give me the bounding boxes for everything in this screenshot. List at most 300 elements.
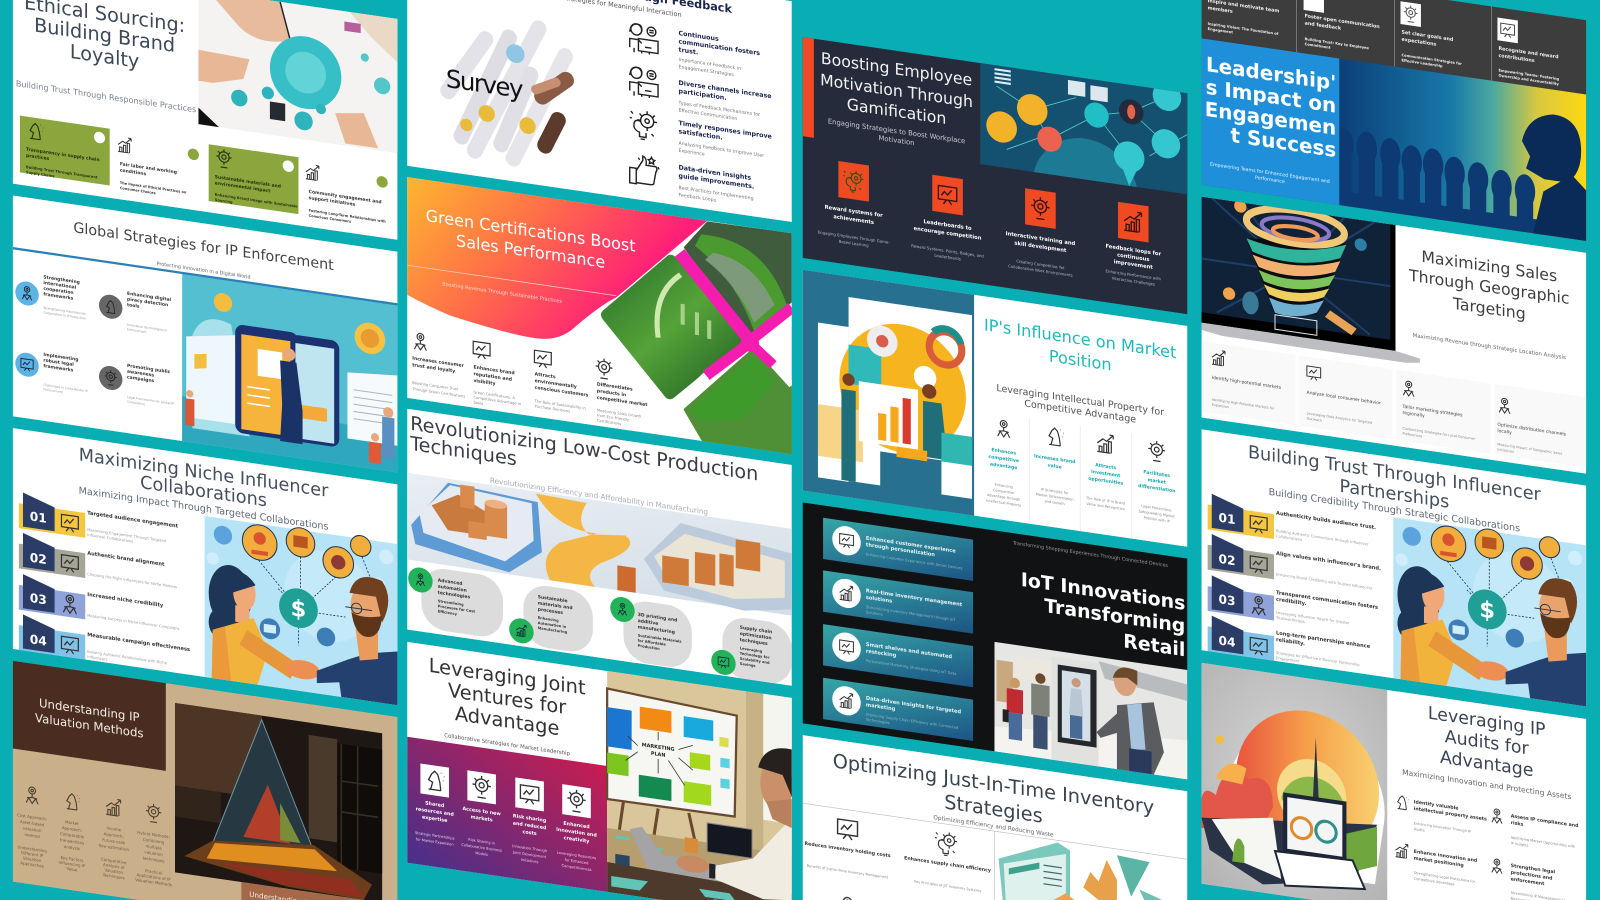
cards background xyxy=(1202,341,1586,468)
item: legal protections: enforcement xyxy=(1511,876,1545,887)
panel captions: Risk Sharing in xyxy=(468,838,495,846)
step 3: Production xyxy=(638,644,660,651)
panel captions: Enhanced xyxy=(563,821,590,831)
icon tile: risk sharing xyxy=(515,777,544,811)
panel captions xyxy=(415,799,597,873)
method icons and text: Analysis of xyxy=(103,862,125,870)
panel captions: for Market Expansion xyxy=(416,837,454,847)
card 4: Community engagement and xyxy=(309,189,382,206)
title: Gamification xyxy=(847,95,946,128)
title: IoT Innovations xyxy=(1021,568,1185,615)
method icons and text: Combining xyxy=(143,837,165,845)
list text: Influencer Collaborations xyxy=(87,533,133,544)
top columns: Commitment xyxy=(1305,42,1331,50)
item: legal protections: Strengthen legal xyxy=(1511,863,1555,875)
item: data-driven insights: Data-driven insights xyxy=(679,163,751,182)
icon tile: shared resources xyxy=(420,763,449,798)
method icons and text: Comparable xyxy=(60,831,85,839)
item: piracy detection: tools xyxy=(127,302,140,310)
list text: credibility. xyxy=(1276,597,1306,607)
item: data-driven insights: Best Practices for Implementing xyxy=(679,185,754,202)
title panel xyxy=(1202,38,1339,205)
item: innovation positioning: market positioning xyxy=(1414,855,1464,869)
title: Loyalty xyxy=(70,40,139,73)
top columns: Effective Leadership xyxy=(1402,58,1443,68)
method icons and text: Market xyxy=(65,819,79,826)
item: legal protections: protections and xyxy=(1511,870,1552,882)
card: inventory: Streamlining Inventory Management through IoT xyxy=(866,605,956,622)
title: IP's Influence on Market xyxy=(984,315,1176,362)
column: investment: The Role of IP in Brand xyxy=(1085,496,1125,506)
item: international cooperation: cooperation xyxy=(43,286,74,296)
step 1: Advanced xyxy=(438,577,462,587)
item: public awareness xyxy=(99,364,174,406)
method icons and text: Comparative xyxy=(101,857,127,865)
benefit columns: Measuring Sales Growth xyxy=(597,408,642,419)
item: public awareness: Promoting public xyxy=(127,363,171,375)
benefit columns: products in xyxy=(597,388,626,398)
card: personalization: Enhanced customer experience xyxy=(866,535,956,555)
reward systems: Engaging Employees Through Game- xyxy=(818,229,890,245)
card: smart shelves: Smart shelves and automated xyxy=(866,642,952,660)
list text xyxy=(87,510,190,674)
title: Maximizing Niche Influencer xyxy=(79,444,329,502)
item: innovation positioning: Strengthening Legal Protections for xyxy=(1414,871,1476,884)
step 2: materials and xyxy=(538,600,573,611)
benefit columns: competitive market xyxy=(597,395,648,408)
item: public awareness: Compliance xyxy=(127,400,145,406)
title: Building Trust Through Influencer xyxy=(1248,442,1541,506)
item: data-driven insights xyxy=(630,154,754,209)
column: competitive advantage: Intellectual Property xyxy=(986,498,1021,508)
subtitle: Leveraging Intellectual Property for xyxy=(996,383,1164,418)
leaderboards: Leaderboards to xyxy=(923,219,972,232)
item: continuous communication: Continuous xyxy=(679,29,719,43)
slide: leadership engagement xyxy=(1202,0,1586,241)
step 3: 3D printing and xyxy=(638,612,677,624)
column: competitive advantage: Enhancing xyxy=(995,483,1013,489)
benefit columns: reputation and xyxy=(473,371,512,383)
list text: Targeted audience engagement xyxy=(87,510,179,530)
panel captions: Competitiveness xyxy=(562,864,592,872)
item: continuous communication: Importance of Feedback in xyxy=(679,57,741,72)
title: Leveraging IP xyxy=(1428,704,1546,741)
card: tailor marketing: regionally xyxy=(1403,410,1425,419)
step 2 xyxy=(509,581,593,655)
card 1 xyxy=(20,116,110,187)
list text xyxy=(1275,510,1381,675)
subtitle: Building Trust Through Responsible Practices xyxy=(16,78,196,114)
card: targeted marketing: Data-driven insights for targeted xyxy=(866,696,961,715)
title: Revolutionizing Low-Cost Production xyxy=(410,412,758,486)
list text: Transparent communication fosters xyxy=(1276,590,1378,611)
item: public awareness: awareness xyxy=(127,369,154,379)
item: public awareness: Legal Frameworks for Global IP xyxy=(127,395,174,406)
step 3: additive xyxy=(638,618,658,627)
method icons and text: Approaches xyxy=(20,860,44,869)
method icons and text: valuation xyxy=(23,825,42,833)
column: investment: Attracts xyxy=(1095,462,1116,471)
title: Position xyxy=(1049,346,1112,375)
item: robust legal xyxy=(15,352,88,394)
card: distribution channels: Measuring Impact of Geographic Sales xyxy=(1497,442,1562,456)
card 4: Conscious Consumers xyxy=(309,214,351,224)
slide: geographic targeting xyxy=(1202,195,1586,474)
top columns: Inspiring Vision: The Foundation of xyxy=(1208,22,1279,36)
column: competitive advantage: advantage xyxy=(990,461,1017,471)
subtitle: Collaborative Strategies for Market Leadership xyxy=(444,733,571,757)
gradient panel xyxy=(407,737,607,892)
title: Boosting Employee xyxy=(821,48,972,90)
item: third icon xyxy=(840,896,855,900)
method icons and text: multiple xyxy=(145,843,162,851)
step 4: techniques xyxy=(740,637,768,647)
card: personalization: Enhancing Customer Experience with Smart Devices xyxy=(866,552,962,571)
list text: Collaborations xyxy=(1276,534,1302,542)
item: diverse channels: participation. xyxy=(679,87,727,102)
title panel: Engagemen xyxy=(1205,97,1336,140)
title block xyxy=(13,661,166,771)
method icons and text: Valuation xyxy=(105,867,123,875)
illustration panel xyxy=(803,270,974,517)
method icons and text: valuation xyxy=(144,849,163,857)
panel captions: Risk sharing xyxy=(513,813,547,824)
title: Sales Performance xyxy=(456,231,605,272)
illustration: influencer handshake xyxy=(1393,514,1586,706)
image: marketing plan whiteboard: MARKETING xyxy=(642,742,675,753)
slide: joint ventures xyxy=(407,642,793,900)
step 4: optimization xyxy=(740,631,772,641)
item: continuous communication: trust. xyxy=(679,46,698,57)
item: timely responses xyxy=(630,109,773,168)
item: valuable assets: Identify valuable xyxy=(1414,799,1458,812)
numbered list: 01 xyxy=(1219,511,1236,527)
item: data-driven insights: guide improvements. xyxy=(679,172,754,191)
step 3 xyxy=(610,595,692,670)
top columns: Ownership and Accountability xyxy=(1498,74,1559,86)
top columns: Empowering Teams: Fostering xyxy=(1498,68,1559,81)
item: supply chain: Key Principles of JIT Inventory Systems xyxy=(914,879,981,893)
step 2: processes xyxy=(538,607,563,616)
step 4: Technology for xyxy=(740,651,770,660)
benefit columns: from Eco-Friendly xyxy=(597,413,630,422)
method icons and text: Future cash xyxy=(102,837,126,846)
card 3: Sustainable materials and xyxy=(215,174,281,190)
subtitle: Engaging Strategies to Boost Workplace xyxy=(828,117,965,145)
list text: Authenticity builds audience trust. xyxy=(1276,511,1376,531)
list text: Choosing the Right Influencers for Niche Markets xyxy=(87,572,177,589)
column: differentiation xyxy=(1138,438,1175,524)
step 1: Streamlining xyxy=(438,599,464,607)
panel captions: markets xyxy=(471,814,493,824)
item: compliance: Assess IP compliance and xyxy=(1511,813,1578,829)
step 3: manufacturing xyxy=(638,624,675,636)
top columns: Building Trust: Key to Employee xyxy=(1305,37,1369,50)
item: continuous communication xyxy=(630,22,760,82)
top columns: Set clear goals and xyxy=(1402,29,1454,43)
top columns xyxy=(1208,0,1559,91)
image: speaker and crowd xyxy=(1333,58,1586,241)
accent rule xyxy=(407,265,616,296)
card: tailor marketing xyxy=(1402,380,1476,446)
card: distribution channels: Optimize distribution channels xyxy=(1497,422,1567,438)
leaderboards xyxy=(911,172,984,265)
card 2 xyxy=(118,138,199,194)
method icons and text: Applications of IP xyxy=(136,872,171,882)
panel captions: expertise xyxy=(422,814,448,824)
slide: IoT retail xyxy=(803,502,1187,780)
subtitle: Maximizing Innovation and Protecting Assets xyxy=(1402,768,1571,801)
top columns: expectations xyxy=(1402,37,1437,48)
top columns: contributions xyxy=(1498,53,1535,64)
title: Audits for xyxy=(1445,727,1529,760)
item: data-driven insights: Feedback Loops xyxy=(679,192,717,204)
card: inventory: Solutions xyxy=(866,610,883,617)
benefit columns: Differentiates xyxy=(597,381,633,393)
list text: Engagement xyxy=(1276,656,1300,664)
title: Transforming xyxy=(1044,594,1185,638)
item: robust legal: Implementing xyxy=(43,352,78,363)
item: timely responses: satisfaction. xyxy=(679,127,723,142)
item: compliance: IP Insights xyxy=(1511,841,1529,848)
method icons and text: Understanding xyxy=(18,844,47,854)
image: marketing plan whiteboard: PLAN xyxy=(651,751,665,759)
card 1: Supply Chains xyxy=(26,170,54,178)
card: targeted marketing: Improving Supply Chain Efficiency with Connected xyxy=(866,713,959,730)
title: Collaborations xyxy=(140,472,267,511)
benefit columns: Attracts xyxy=(535,371,556,380)
title: Optimizing Just-In-Time Inventory xyxy=(833,749,1154,819)
top columns: Recognize and reward xyxy=(1498,46,1559,61)
column: competitive advantage: Enhances xyxy=(991,447,1016,457)
top columns: Communication Strategies for xyxy=(1402,53,1462,66)
item: international cooperation: frameworks xyxy=(43,291,74,302)
card: smart shelves: restocking xyxy=(866,649,897,659)
item: piracy detection: Enhancing digital xyxy=(127,291,171,303)
slide: green certifications xyxy=(407,177,792,457)
card: targeted marketing: Technologies xyxy=(865,718,890,725)
panel captions: costs xyxy=(523,829,537,837)
item: piracy detection: Innovative Technologies in xyxy=(127,323,167,333)
card: distribution channels xyxy=(1497,397,1567,462)
list text: Increased niche credibility xyxy=(87,592,164,609)
divider line xyxy=(13,247,397,305)
dividers xyxy=(1029,418,1131,539)
method icons and text: analysis xyxy=(64,844,80,851)
subtitle: Boosting Revenue Through Sustainable Practices xyxy=(442,281,562,305)
method icons and text: Income xyxy=(106,825,122,833)
subtitle: Maximizing Revenue through Strategic Location Analysis xyxy=(1413,333,1566,361)
card: consumer behavior: Leveraging Data Analytics for Targeted xyxy=(1307,411,1372,425)
benefit columns xyxy=(411,330,648,430)
subtitle: Maximizing Impact Through Targeted Collaborations xyxy=(79,485,328,533)
list text: Long-term partnerships enhance xyxy=(1276,630,1371,650)
panel captions: for Enhanced xyxy=(565,858,588,865)
item: supply chain xyxy=(904,826,991,895)
panel captions: Models xyxy=(475,851,488,857)
step 4: Supply chain xyxy=(740,625,772,635)
item: valuable assets: Enhancing Innovation Through IP xyxy=(1414,821,1471,834)
list text: Measurable campaign effectiveness xyxy=(87,632,190,653)
card 3 xyxy=(209,144,298,214)
method icons and text: Value xyxy=(66,866,78,873)
card 4: Fostering Long-Term Relationships with xyxy=(309,208,386,224)
interactive training: Creating Competitive Yet xyxy=(1016,258,1065,270)
interactive training: Interactive training and xyxy=(1006,231,1075,247)
item: robust legal: frameworks xyxy=(43,363,74,374)
slide: IP audits xyxy=(1202,663,1586,900)
title: Leveraging Joint xyxy=(429,654,586,700)
illustration: gauge and laptop xyxy=(1202,663,1387,900)
slide: IP valuation methods xyxy=(13,661,397,900)
card: distribution channels: locally xyxy=(1497,428,1512,436)
interactive training: skill development xyxy=(1014,241,1067,254)
title panel: s Impact on xyxy=(1206,75,1336,118)
item: timely responses: Analyzing Feedback to Improve User xyxy=(679,141,764,159)
item: international cooperation xyxy=(15,275,86,320)
card: consumer behavior: Analyze local consumer behavior xyxy=(1307,390,1381,407)
list text: reliability. xyxy=(1276,637,1305,647)
method icons and text: Cost Approach: xyxy=(17,812,47,822)
method icons and text: Techniques xyxy=(102,872,125,880)
card 2: The Impact of Ethical Practices on xyxy=(120,181,187,195)
list text: Enhancing Brand Credibility with Trusted Influencers xyxy=(1276,572,1372,590)
title panel: Leadership' xyxy=(1206,52,1336,95)
column: differentiation: market xyxy=(1148,477,1167,486)
reward systems: achievements xyxy=(833,214,874,226)
list text: Strategies for Effective Influencer Partnership xyxy=(1276,651,1360,667)
column: competitive advantage xyxy=(986,418,1021,508)
method icons and text: techniques xyxy=(143,855,165,864)
item: compliance: risks xyxy=(1511,820,1523,828)
item: legal protections xyxy=(1492,858,1567,900)
item: diverse channels: Diverse channels increase xyxy=(679,79,772,100)
column: investment: Value and Recognition xyxy=(1086,502,1125,511)
item: innovation positioning: Enhance innovation and xyxy=(1414,849,1477,864)
item: holding costs: Reduces inventory holding costs xyxy=(805,841,891,859)
title: Ventures for xyxy=(448,679,567,719)
card: personalization xyxy=(823,518,973,581)
card: high-potential markets xyxy=(1212,349,1282,417)
list text: Leveraging Influencer Reach for Greater xyxy=(1276,611,1350,625)
slide: low-cost production xyxy=(407,409,792,687)
top columns: and feedback xyxy=(1305,20,1342,32)
method icons and text: Valuation xyxy=(23,855,42,863)
top columns: members xyxy=(1208,5,1233,15)
numbered list xyxy=(1208,493,1274,661)
column: investment xyxy=(1085,432,1125,511)
image: funnel on laptop xyxy=(1202,195,1420,365)
step 2: Sustainable xyxy=(538,594,568,604)
card: personalization: through personalization xyxy=(866,542,935,558)
accent bar xyxy=(803,37,814,138)
title: Partnerships xyxy=(1339,476,1449,513)
card: inventory: Real-time inventory management xyxy=(866,588,963,608)
method icons and text: Approach: xyxy=(62,825,82,833)
feedback loops: Interactive Challenges xyxy=(1112,275,1155,287)
method icons and text: Influencing IP xyxy=(59,860,86,869)
list text: Measuring Success in Niche Influencer Campaigns xyxy=(87,614,179,631)
item: continuous communication: communication fosters xyxy=(679,37,760,57)
step 1: Efficiency xyxy=(438,609,458,616)
item: continuous communication: Engagement Strategies xyxy=(679,64,734,78)
item: piracy detection xyxy=(98,292,171,334)
method icons and text: Valuation Methods xyxy=(135,877,172,887)
list text: Building Authentic Relationships with Niche xyxy=(87,650,168,665)
rules xyxy=(803,803,1187,900)
item: public awareness: campaigns xyxy=(127,374,155,384)
feedback loops: improvement xyxy=(1114,259,1153,271)
panel captions: Access to new xyxy=(462,806,501,818)
column: investment: investment xyxy=(1091,469,1121,479)
leaderboards: Reward Systems: Points, Badges, and xyxy=(911,243,984,259)
panel captions: Joint Development xyxy=(512,850,547,859)
slide: gamification xyxy=(803,29,1187,314)
icon tile: innovation xyxy=(562,784,591,818)
step 3: for Affordable xyxy=(638,639,666,647)
benefit columns: Green Certifications: A xyxy=(473,390,515,400)
image: gamification network xyxy=(980,55,1187,194)
numbered list: 02 xyxy=(30,551,47,567)
image: smart store photo xyxy=(994,642,1187,780)
panel captions: Collaborative Business xyxy=(461,843,502,853)
image: green glass panels xyxy=(607,206,792,457)
method icons and text: Asset-based xyxy=(20,819,45,827)
column: differentiation: Safeguarding Market xyxy=(1139,509,1175,519)
numbered list: 03 xyxy=(1219,592,1236,609)
column: brand value: value xyxy=(1048,463,1062,471)
benefit columns: Increases consumer xyxy=(412,356,464,369)
column: competitive advantage: Advantage through xyxy=(987,493,1020,502)
benefit columns: Sales xyxy=(473,401,483,406)
illustration: influencer handshake xyxy=(205,513,397,705)
subtitle: Protecting Innovation in a Digital World xyxy=(157,261,251,281)
benefit columns: environmentally xyxy=(535,378,577,390)
item: international cooperation: Strengthening International xyxy=(43,306,86,316)
column: differentiation: Facilitates xyxy=(1143,469,1170,479)
title: Advantage xyxy=(1440,748,1533,781)
panel captions: Strategic Partnerships xyxy=(415,831,455,841)
numbered list: 04 xyxy=(1219,633,1236,650)
method icons and text: flow estimation xyxy=(99,843,129,852)
step 2: Enhancing xyxy=(538,616,559,623)
column: brand value: Increases brand xyxy=(1034,453,1075,465)
subtitle: Revolutionizing Efficiency and Affordability in Manufacturing xyxy=(490,476,708,517)
title block: Valuation Methods xyxy=(35,711,144,741)
card: tailor marketing: Tailor marketing strategies xyxy=(1402,404,1463,419)
top columns: Foster open communication xyxy=(1305,13,1380,30)
numbered list: 01 xyxy=(30,509,47,526)
card 1: Building Trust Through Transparent xyxy=(26,165,98,180)
title panel: Empowering Teams for Enhanced Engagement and xyxy=(1210,162,1330,185)
card: distribution channels: Initiatives xyxy=(1497,447,1514,454)
list text: Building Authentic Connections through Influencer xyxy=(1276,529,1369,547)
item: international cooperation: Strengthening xyxy=(43,274,80,286)
item: diverse channels xyxy=(630,66,772,127)
benefit columns: Through Green Certifications xyxy=(411,387,465,399)
title: Advantage xyxy=(455,702,559,740)
image: sourcing plan on desk xyxy=(198,0,397,153)
benefit columns: Enhances brand xyxy=(473,364,515,376)
column: brand value: and Growth xyxy=(1045,499,1065,506)
method icons and text: transactions xyxy=(60,837,84,846)
slide: global IP enforcement xyxy=(13,195,397,473)
item: timely responses: Experience xyxy=(679,148,705,158)
feedback loops: Feedback loops for xyxy=(1105,244,1161,258)
slide: just-in-time inventory xyxy=(803,735,1187,900)
title: Motivation Through xyxy=(820,70,973,111)
benefit columns: Competitive Advantage in xyxy=(473,395,522,406)
